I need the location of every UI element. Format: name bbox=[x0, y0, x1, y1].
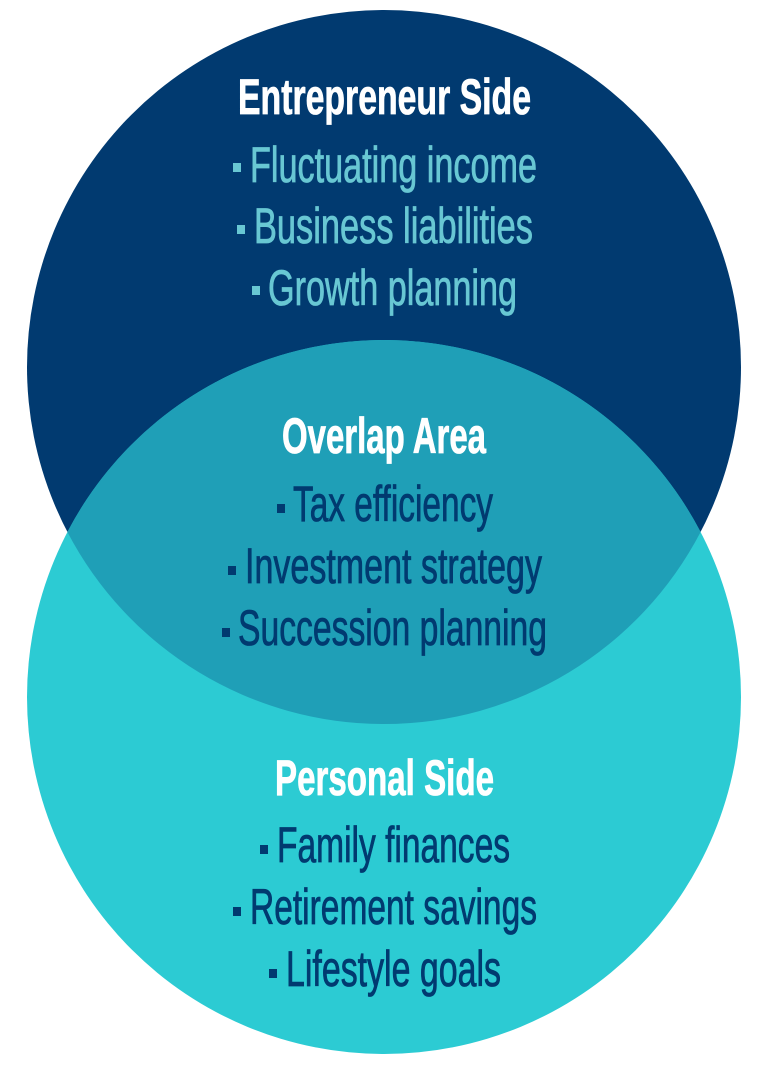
list item: succession planning bbox=[222, 600, 547, 656]
section: personal side bbox=[233, 750, 537, 997]
section: overlap area bbox=[222, 408, 547, 656]
section: entrepreneur side bbox=[233, 69, 537, 316]
list item: growth planning: Growth planning bbox=[268, 260, 517, 316]
list item: growth planning bbox=[252, 260, 517, 316]
heading: personal side: Personal Side bbox=[275, 750, 494, 806]
circle: entrepreneur side bbox=[27, 10, 741, 724]
list item: lifestyle goals: Lifestyle goals bbox=[286, 941, 501, 997]
list item: business liabilities bbox=[237, 198, 533, 254]
list item: fluctuating income: Fluctuating income bbox=[250, 137, 537, 193]
list item: investment strategy bbox=[228, 538, 542, 594]
list item: investment strategy: Investment strategy bbox=[245, 538, 542, 594]
heading: entrepreneur side: Entrepreneur Side bbox=[238, 69, 531, 125]
list item: fluctuating income bbox=[233, 137, 537, 193]
list item: lifestyle goals bbox=[269, 941, 501, 997]
list item: retirement savings: Retirement savings bbox=[250, 879, 537, 935]
list item: family finances: Family finances bbox=[277, 817, 510, 873]
list item: family finances bbox=[260, 817, 510, 873]
list item: tax efficiency bbox=[277, 476, 493, 532]
circle: personal side bbox=[27, 340, 741, 1054]
list item: tax efficiency: Tax efficiency bbox=[293, 476, 493, 532]
list item: retirement savings bbox=[233, 879, 537, 935]
overlap lens bbox=[67, 340, 701, 724]
heading: overlap area: Overlap Area bbox=[282, 408, 487, 464]
list item: business liabilities: Business liabilities bbox=[254, 198, 533, 254]
list item: succession planning: Succession planning bbox=[238, 600, 547, 656]
